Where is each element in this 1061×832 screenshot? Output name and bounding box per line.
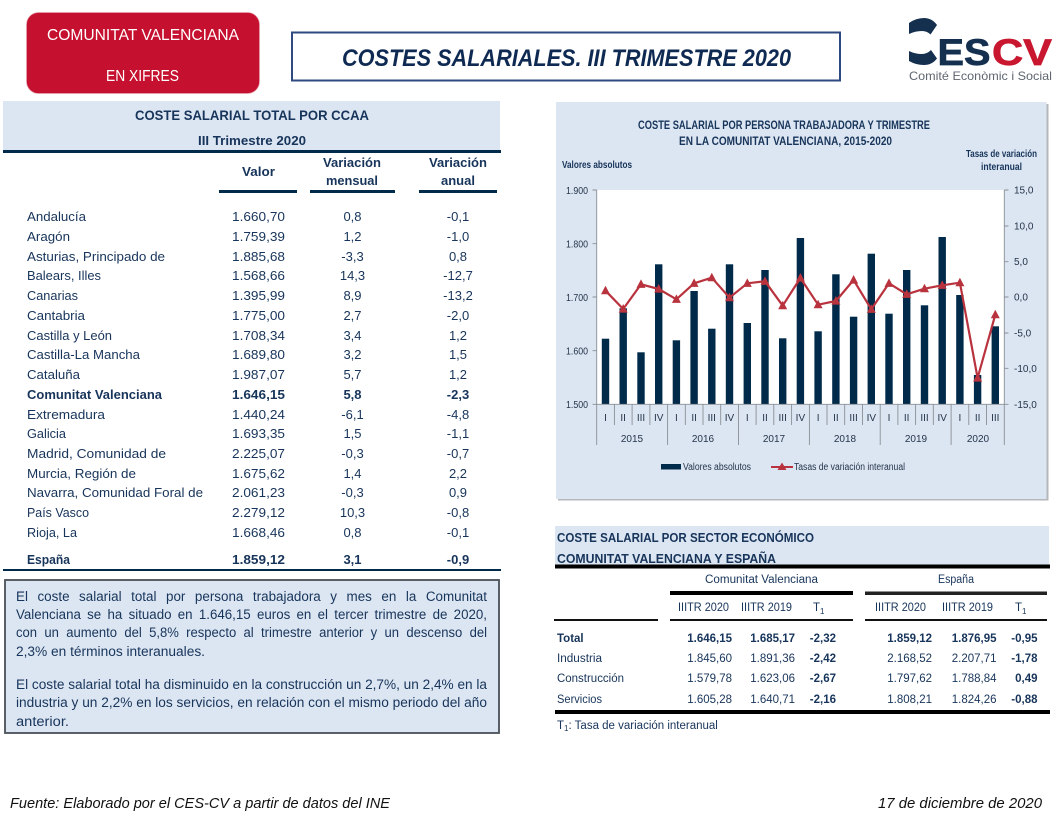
text block: summary: Valenciana se ha situado en 1.646,15 euros en el tercer trimestre de 2020, [16, 607, 487, 622]
column headers: Variación [323, 155, 381, 170]
right axis title: interanual [981, 161, 1022, 173]
table rows: Navarra, Comunidad Foral de [27, 485, 203, 500]
table heading: III Trimestre 2020 [198, 134, 306, 148]
text block: summary: anterior. [16, 714, 69, 729]
sector rows: -2,67 [810, 673, 836, 685]
table rows: 1.646,15 [232, 387, 285, 402]
quarter labels: II [762, 413, 768, 424]
column headers: IIITR 2020 [678, 602, 729, 614]
table heading: COSTE SALARIAL TOTAL POR CCAA [135, 107, 369, 123]
group headers [670, 574, 1047, 595]
table rows: 1,2 [449, 328, 467, 343]
table rows: -3,3 [341, 249, 364, 264]
year labels: 2015 [621, 434, 644, 445]
table rows: Andalucía [27, 209, 87, 224]
group headers: España [938, 574, 975, 586]
quarter labels: IV [937, 413, 947, 424]
sector rows [555, 633, 1050, 714]
sector rows: 2.168,52 [887, 653, 932, 665]
column headers: Valor [242, 164, 275, 179]
legend: Tasas de variación interanual [794, 462, 905, 473]
table rows: 0,8 [343, 209, 362, 224]
table rows: 0,9 [449, 485, 467, 500]
column headers: IIITR 2019 [741, 602, 792, 614]
source note: Fuente: Elaborado por el CES-CV a partir de datos del INE [10, 796, 390, 812]
quarter labels: III [779, 413, 787, 424]
table rows: 1.693,35 [232, 426, 285, 441]
table rows: 1.987,07 [232, 367, 285, 382]
table rows: Murcia, Región de [27, 466, 136, 481]
footnote: T [557, 720, 564, 732]
table rows: 1,4 [343, 466, 362, 481]
table rows: 2.061,23 [232, 485, 285, 500]
quarter labels: II [904, 413, 909, 424]
quarter labels: II [620, 413, 626, 424]
table rows: -0,9 [447, 552, 469, 567]
table rows: -6,1 [341, 407, 364, 422]
table rows: Balears, Illes [27, 268, 101, 283]
table rows: España [27, 552, 71, 567]
quarter labels: I [604, 413, 607, 424]
table rows: 10,3 [340, 505, 365, 520]
left axis labels: 1.800 [566, 240, 588, 250]
column headers: Variación [429, 155, 487, 170]
sector rows: -2,32 [810, 633, 836, 645]
table rows: 1,2 [343, 229, 362, 244]
quarter labels [604, 413, 999, 424]
quarter labels: IV [654, 413, 664, 424]
text block: summary: El coste salarial total ha disminuido en la construcción un 2,7%, un 2,4% en la [16, 677, 488, 692]
table rows: 1.759,39 [232, 229, 285, 244]
sector rows: 1.797,62 [887, 673, 932, 685]
sector table heading: COSTE SALARIAL POR SECTOR ECONÓMICO [557, 530, 814, 545]
sector rows: 0,49 [1015, 673, 1038, 685]
table rows: 1.689,80 [232, 347, 285, 362]
quarter labels: III [637, 413, 645, 424]
quarter labels: I [675, 413, 678, 424]
table rows: Galicia [27, 426, 67, 441]
quarter labels: III [991, 413, 999, 424]
quarter labels: IV [867, 413, 876, 424]
sector rows: 1.646,15 [687, 633, 733, 645]
table rows: -0,3 [341, 485, 364, 500]
table rows: 1.660,70 [232, 209, 285, 224]
table rows: -2,0 [447, 308, 469, 323]
logo: CES-CV: ES [938, 32, 990, 73]
table rows: 1,2 [449, 367, 467, 382]
table rows: -13,2 [443, 288, 473, 303]
sector rows: -1,78 [1011, 653, 1038, 665]
footnote: : Tasa de variación interanual [568, 720, 718, 732]
table rows: 2.225,07 [232, 446, 285, 461]
quarter labels: III [849, 413, 858, 424]
sector table heading: COMUNITAT VALENCIANA Y ESPAÑA [557, 551, 776, 566]
table rows: -0,7 [447, 446, 469, 461]
right axis labels: -15,0 [1014, 400, 1037, 411]
left axis labels: 1.500 [566, 400, 588, 411]
sector rows: 1.876,95 [952, 633, 997, 645]
year labels: 2017 [763, 434, 786, 445]
badge: Comunitat Valenciana en xifres [26, 12, 260, 94]
right axis labels: -5,0 [1014, 328, 1032, 340]
right axis labels: 10,0 [1014, 222, 1034, 232]
table rows: Aragón [27, 229, 70, 244]
table rows: 1.668,46 [232, 525, 285, 540]
column headers: 1 [820, 607, 825, 616]
column headers: 1 [1022, 607, 1027, 616]
sector rows: 1.788,84 [952, 673, 997, 685]
sector rows: 2.207,71 [952, 653, 996, 665]
column headers: anual [441, 173, 475, 188]
table rows: -1,0 [447, 229, 469, 244]
sector rows: 1.685,17 [750, 633, 795, 645]
left axis labels: 1.700 [566, 293, 588, 304]
chart title: COSTE SALARIAL POR PERSONA TRABAJADORA Y TRIMESTRE [638, 120, 930, 132]
quarter labels: III [708, 413, 716, 424]
quarter labels: II [833, 413, 839, 424]
panel: chart [556, 102, 1048, 500]
table rows: 1.885,68 [232, 249, 285, 264]
logo: CES-CV: Comité Econòmic i Social [909, 69, 1052, 83]
year labels: 2016 [692, 434, 715, 445]
table rows: 1.859,12 [232, 552, 285, 567]
sector rows: 1.824,26 [952, 694, 996, 706]
quarter labels: I [959, 413, 961, 424]
table rows: 1.568,66 [232, 268, 285, 283]
left axis title: Valores absolutos [562, 159, 632, 171]
table rows: Comunitat Valenciana [27, 387, 163, 402]
left axis labels: 1.900 [566, 186, 588, 197]
table rows: -0,3 [341, 446, 364, 461]
table rows [3, 209, 501, 571]
sector rows: 1.859,12 [887, 633, 932, 645]
sector rows: 1.640,71 [750, 694, 795, 706]
table rows: -0,1 [447, 209, 469, 224]
table rows: 5,8 [343, 387, 362, 402]
table rows: Castilla y León [27, 328, 112, 343]
legend [661, 462, 905, 473]
column headers: IIITR 2019 [942, 602, 993, 614]
text block: summary [5, 580, 499, 733]
sector rows: 1.579,78 [687, 673, 732, 685]
table rows: 0,8 [449, 249, 467, 264]
table rows: 1.675,62 [232, 466, 285, 481]
axes and ticks [592, 190, 1008, 445]
table rows: País Vasco [27, 505, 89, 520]
date: 17 de diciembre de 2020 [878, 796, 1042, 812]
sector rows: 1.605,28 [687, 694, 732, 706]
year labels: 2020 [967, 434, 990, 445]
quarter labels: II [975, 413, 980, 424]
sector table heading [555, 526, 1050, 568]
right axis labels: 5,0 [1014, 257, 1028, 268]
text block: summary: con un aumento del 5,8% respecto al trimestre anterior y un descenso del [16, 625, 487, 640]
table rows: Asturias, Principado de [27, 249, 165, 264]
year labels: 2018 [834, 434, 857, 445]
table rows: 2,7 [343, 308, 362, 323]
table rows: -1,1 [447, 426, 469, 441]
title: COSTES SALARIALES. III TRIMESTRE 2020 [342, 45, 792, 72]
table rows: 1.708,34 [232, 328, 285, 343]
sector rows: Industria [557, 653, 603, 665]
left axis labels: 1.600 [566, 346, 588, 358]
chart title [638, 120, 930, 148]
table rows: -12,7 [443, 268, 473, 283]
table rows: 0,8 [343, 525, 362, 540]
badge: Comunitat Valenciana en xifres: COMUNITAT VALENCIANA [47, 27, 239, 44]
column headers [219, 155, 497, 193]
column headers: T [813, 602, 820, 614]
table rows: 14,3 [340, 268, 365, 283]
right axis labels [1014, 186, 1037, 411]
table rows: 1,5 [343, 426, 362, 441]
table rows: 8,9 [343, 288, 362, 303]
quarter labels: I [746, 413, 749, 424]
text block: summary: 2,3% en términos interanuales. [16, 644, 205, 659]
text block: summary: El coste salarial total por persona trabajadora y mes en la Comunitat [16, 589, 487, 604]
line: tasas de variación interanual [606, 278, 995, 378]
right axis title [966, 148, 1037, 173]
table rows: -4,8 [447, 407, 469, 422]
table rows: Cataluña [27, 367, 81, 382]
table rows: 2.279,12 [232, 505, 285, 520]
column headers [554, 602, 1047, 621]
table rows: -0,8 [447, 505, 469, 520]
quarter labels: I [817, 413, 819, 424]
chart title: EN LA COMUNITAT VALENCIANA, 2015-2020 [679, 136, 892, 148]
sector rows: 1.845,60 [687, 653, 732, 665]
table rows: 2,2 [449, 466, 467, 481]
panel: coste salarial total por CCAA [3, 101, 501, 571]
table rows: Rioja, La [27, 525, 78, 540]
title [292, 32, 840, 80]
sector rows: Servicios [557, 694, 602, 706]
right axis labels: 0,0 [1014, 292, 1028, 304]
column headers: mensual [326, 173, 378, 188]
table rows: Castilla-La Mancha [27, 347, 141, 362]
column headers: IIITR 2020 [875, 602, 926, 614]
text block: summary: industria y un 2,2% en los servicios, en relación con el mismo periodo del año [16, 695, 487, 710]
right axis title: Tasas de variación [966, 148, 1037, 160]
sector rows: Construcción [557, 673, 624, 685]
table rows: 3,4 [343, 328, 362, 343]
sector rows: 1.891,36 [750, 653, 795, 665]
right axis labels: 15,0 [1014, 186, 1034, 196]
column headers: T [1015, 602, 1022, 614]
table rows: -0,1 [447, 525, 469, 540]
sector rows: 1.623,06 [750, 673, 795, 685]
table rows: Extremadura [27, 407, 106, 422]
sector rows: -0,88 [1011, 694, 1038, 706]
sector rows: 1.808,21 [887, 694, 932, 706]
quarter labels: II [691, 413, 697, 424]
year labels [621, 434, 990, 445]
left axis labels [566, 186, 588, 411]
plot area [597, 190, 1004, 404]
quarter labels: IV [796, 413, 805, 424]
sector rows: -0,95 [1011, 633, 1038, 645]
legend: Valores absolutos [683, 462, 751, 473]
table rows: 1.395,99 [232, 288, 285, 303]
quarter labels: III [920, 413, 929, 424]
table rows: 1,5 [449, 347, 467, 362]
table rows: 5,7 [343, 367, 362, 382]
logo: CES-CV: CV [992, 32, 1052, 73]
table rows: Madrid, Comunidad de [27, 446, 166, 461]
table rows: 1.440,24 [232, 407, 285, 422]
badge: Comunitat Valenciana en xifres: EN XIFRES [106, 68, 179, 85]
sector rows: -2,42 [810, 653, 836, 665]
table rows: Canarias [27, 288, 78, 303]
quarter labels: IV [725, 413, 735, 424]
table rows: 1.775,00 [232, 308, 285, 323]
table heading [3, 101, 501, 153]
footnote: 1 [564, 724, 569, 733]
year labels: 2019 [905, 434, 928, 445]
logo: CES-CV [909, 18, 1052, 83]
quarter labels: I [888, 413, 890, 424]
table rows: Cantabria [27, 308, 86, 323]
table rows: 3,1 [343, 552, 362, 567]
right axis labels: -10,0 [1014, 364, 1037, 375]
table rows: 3,2 [343, 347, 362, 362]
bars: valores absolutos [602, 237, 999, 404]
table rows: -2,3 [447, 387, 469, 402]
group headers: Comunitat Valenciana [705, 574, 819, 586]
sector rows: -2,16 [810, 694, 836, 706]
panel: coste salarial por sector económico [554, 526, 1050, 733]
sector rows: Total [557, 633, 584, 645]
